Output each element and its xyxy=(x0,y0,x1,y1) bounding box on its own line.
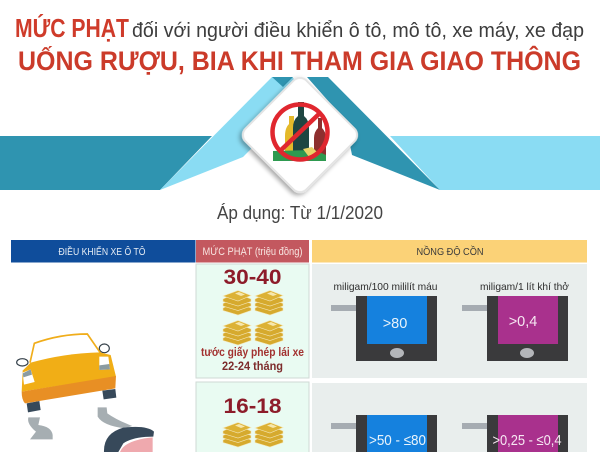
device: blood: >50 - ≤80 xyxy=(369,432,426,449)
icon: dark bottle xyxy=(293,102,309,154)
panel: fine 30-40: tước giấy phép lái xe xyxy=(201,347,304,359)
banner ribbon xyxy=(0,77,600,190)
icon: no alcohol sign xyxy=(239,74,361,196)
icon: red bottle xyxy=(314,118,326,158)
panel: fine 16-18 xyxy=(196,382,309,452)
header: alcohol level xyxy=(312,240,587,262)
bumper xyxy=(22,376,116,403)
panel: fine 16-18: 16-18 xyxy=(224,395,282,418)
title: đối với người điều khiển ô tô, mô tô, xe máy, xe đạp xyxy=(132,20,584,42)
icon: prohibition circle xyxy=(272,104,328,160)
panel: alcohol level row 1 xyxy=(312,264,587,378)
skid marks xyxy=(28,407,132,439)
header: alcohol level: NỒNG ĐỘ CỒN xyxy=(416,245,484,258)
mirrors xyxy=(17,344,109,366)
wheels xyxy=(27,389,116,412)
icon: money stacks xyxy=(223,290,283,345)
icon: money stacks xyxy=(223,422,283,447)
header: fine: MỨC PHẠT (triệu đồng) xyxy=(202,245,302,258)
device: breath: >0,4 xyxy=(509,314,537,330)
illustration: driver head xyxy=(104,427,154,452)
header: driver: ĐIỀU KHIỂN XE Ô TÔ xyxy=(58,245,146,258)
panel: fine 30-40: 22-24 tháng xyxy=(222,361,283,373)
header: fine xyxy=(196,240,309,262)
illustration: car xyxy=(17,334,132,439)
effective date: Áp dụng: Từ 1/1/2020 xyxy=(217,203,383,223)
device: breath xyxy=(462,415,568,452)
icon: bottle crate xyxy=(273,150,326,161)
panel: fine 30-40: 30-40 xyxy=(224,266,282,289)
panel: alcohol level row 1: miligam/100 mililít máu xyxy=(334,281,438,293)
headlights xyxy=(23,369,35,385)
device: blood: >80 xyxy=(383,316,407,332)
device: blood xyxy=(331,296,437,361)
header: driver xyxy=(11,240,196,262)
cabin xyxy=(30,334,101,363)
hood xyxy=(22,352,116,392)
icon: yellow bottle xyxy=(285,116,298,152)
device: breath xyxy=(462,296,568,361)
title xyxy=(15,13,584,76)
panel: fine 30-40 xyxy=(196,264,309,378)
panel: alcohol level row 2 xyxy=(312,383,587,452)
device: blood xyxy=(331,415,437,452)
panel: alcohol level row 1: miligam/1 lít khí thở xyxy=(480,281,569,293)
device: breath: >0,25 - ≤0,4 xyxy=(492,432,562,449)
title: MỨC PHẠT xyxy=(15,13,129,43)
